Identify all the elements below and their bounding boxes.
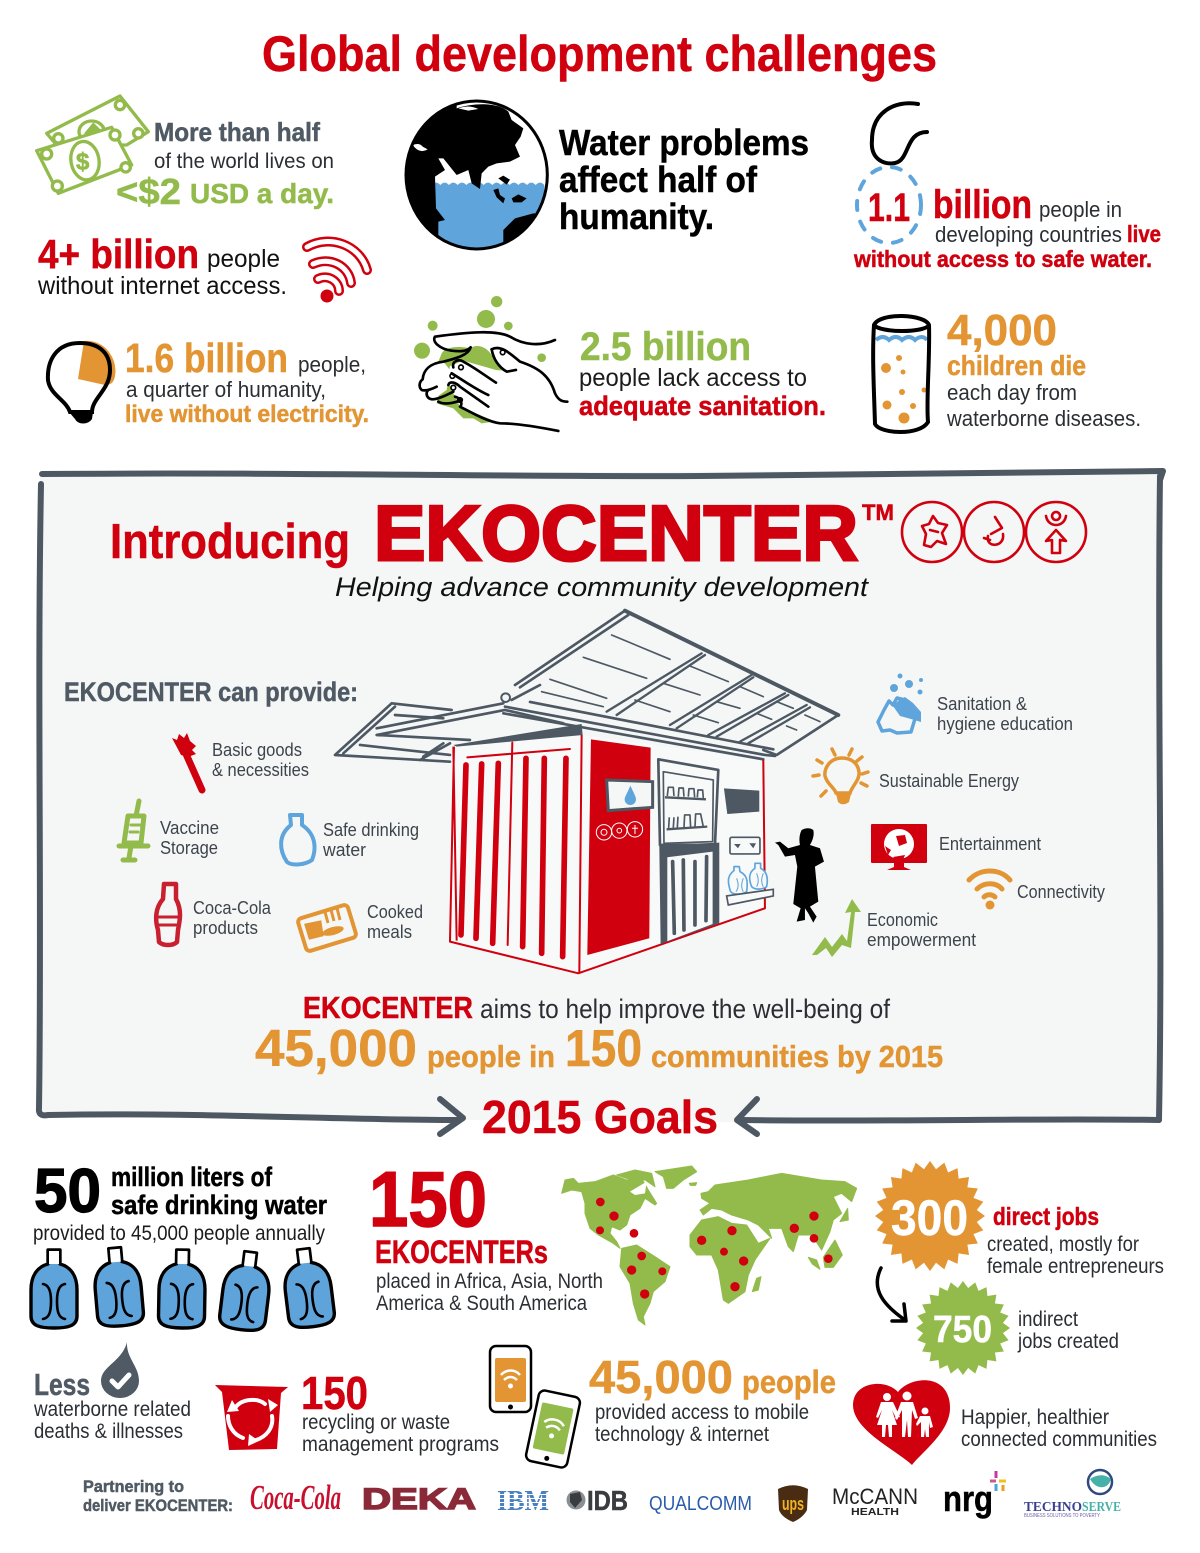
service: safe drinking water: water (322, 840, 366, 860)
service: cooked meals: Cooked (367, 902, 423, 922)
text: children die: children die (947, 350, 1086, 381)
small badges on panel (596, 822, 643, 840)
panel background and sketch border (39, 470, 1163, 1134)
logo: TechnoServe: TECHNO (1024, 1500, 1082, 1515)
service: vaccine storage: Vaccine (160, 818, 219, 838)
text: internet (37, 231, 287, 300)
text: mobile access: people (742, 1364, 836, 1400)
icon: three EKOCENTER badges (902, 502, 1086, 562)
service: Coca-Cola products: products (193, 918, 258, 938)
panel: introducing EKOCENTER (39, 470, 1163, 1134)
service: basic goods (172, 733, 309, 790)
text: internet: people (207, 245, 280, 273)
goal: less waterborne illness (33, 1342, 191, 1443)
logo: UPS: ups (782, 1494, 804, 1514)
illustration: EKOCENTER kiosk (335, 611, 838, 973)
logo: IDB: IDB (587, 1485, 628, 1516)
text: direct jobs: direct jobs (993, 1203, 1099, 1231)
water taps plate (730, 837, 760, 854)
text: recycling: management programs (302, 1433, 499, 1456)
service: entertainment: Entertainment (939, 834, 1041, 854)
text: more than half: <$2 (116, 171, 181, 212)
text: 150 EKOCENTERs: EKOCENTERs (375, 1234, 548, 1270)
text: electricity: people, (298, 352, 366, 377)
goal: 150 EKOCENTERs (369, 1155, 857, 1325)
text: electricity: live without electricity. (125, 401, 369, 428)
logo: TechnoServe (1024, 1470, 1121, 1519)
icon: money bills: $ (76, 148, 89, 175)
kiosk outline (450, 735, 765, 973)
arrow: direct to indirect jobs (877, 1268, 906, 1321)
goal: happier communities (853, 1380, 1157, 1465)
logo: TechnoServe: BUSINESS SOLUTIONS TO POVERTY (1024, 1513, 1101, 1519)
icon: drop with check (101, 1342, 139, 1398)
text: more than half (116, 117, 334, 212)
icon: washing hands (414, 296, 567, 431)
icon: orange phone (490, 1346, 531, 1412)
service: sustainable energy (813, 749, 1019, 804)
service: sustainable energy: Sustainable Energy (879, 771, 1019, 791)
icon: five water jugs (31, 1246, 336, 1333)
text: children die: waterborne diseases. (946, 406, 1141, 431)
stat: 1.6 billion without electricity (48, 335, 369, 428)
text: 50 million liters (33, 1157, 327, 1245)
text: sanitation: 2.5 billion (580, 325, 751, 369)
logo: Coca-Cola: Coca-Cola (250, 1478, 341, 1517)
text: sanitation: people lack access to (579, 364, 807, 392)
service: economic empowerment: empowerment (867, 930, 976, 950)
service: economic empowerment: Economic (867, 910, 938, 930)
text: electricity (125, 335, 369, 428)
text: 50 million liters: safe drinking water (111, 1190, 327, 1220)
text: 50 million liters: million liters of (111, 1162, 273, 1192)
text: less deaths: waterborne related (33, 1398, 191, 1421)
logo: IBM: IBM (497, 1486, 549, 1517)
text: 150 EKOCENTERs: America & South America (376, 1292, 587, 1315)
text: more than half: More than half (154, 117, 320, 147)
text: 150 EKOCENTERs: 150 (369, 1155, 487, 1243)
service: connectivity (969, 871, 1105, 910)
text: direct jobs: created, mostly for (987, 1233, 1139, 1256)
kiosk roof and solar panels (335, 611, 838, 762)
service: connectivity: Connectivity (1017, 882, 1105, 902)
service: vaccine storage: Storage (160, 838, 218, 858)
service: basic goods: Basic goods (212, 740, 302, 760)
service: entertainment (871, 824, 1041, 870)
text: mobile access: technology & internet (595, 1423, 769, 1446)
text: partnering to deliver (83, 1477, 233, 1515)
logo: McCann Health: McCANN (832, 1484, 918, 1509)
partners strip (83, 1470, 1121, 1522)
text: less deaths (33, 1367, 191, 1443)
text: electricity: a quarter of humanity, (126, 377, 326, 402)
badge: 750 (916, 1281, 1010, 1375)
text: indirect jobs: jobs created (1017, 1330, 1119, 1353)
service: sanitation and hygiene: Sanitation & (937, 694, 1027, 714)
callout: EKOCENTER aims: people in (427, 1039, 555, 1074)
text: water problems: humanity. (559, 196, 714, 237)
title: Global development challenges (262, 26, 937, 82)
service: sanitation and hygiene (878, 674, 1073, 734)
stat: 4,000 children die (873, 306, 1141, 432)
stat: more than half live on under $2 (37, 96, 334, 212)
dark sign box (724, 788, 759, 814)
icon: green phone (525, 1389, 581, 1469)
heading: Introducing EKOCENTER: Introducing (110, 515, 350, 569)
text: mobile access: provided access to mobile (595, 1401, 809, 1424)
icon: money bills (37, 96, 148, 193)
shelves and vending door (658, 759, 718, 845)
text: recycling: 150 (301, 1367, 368, 1419)
text: 150 EKOCENTERs: placed in Africa, Asia, North (376, 1270, 603, 1293)
service: vaccine storage (119, 801, 219, 860)
silhouette: woman (775, 828, 824, 923)
text: safe water: without access to safe water. (853, 246, 1152, 272)
text: partnering to deliver: deliver EKOCENTER: (83, 1496, 233, 1515)
text: sanitation: adequate sanitation. (579, 391, 826, 421)
text: safe water: billion (933, 183, 1032, 227)
heading: can provide: EKOCENTER can provide: (64, 677, 358, 707)
logo: TechnoServe: SERVE (1082, 1500, 1121, 1515)
service: cooked meals (297, 902, 423, 952)
world map with red location dots (562, 1166, 857, 1325)
service: Coca-Cola products: Coca-Cola (193, 898, 272, 918)
text: recycling (301, 1367, 499, 1456)
icon: half-submerged globe (400, 95, 548, 252)
badge: 750: 750 (933, 1309, 992, 1351)
logo: DEKA: DEKA (362, 1483, 476, 1516)
heading: 2015 Goals: 2015 Goals (482, 1091, 718, 1143)
text: mobile access: 45,000 (589, 1351, 733, 1403)
text: safe water: developing countries (935, 222, 1122, 247)
text: safe water: 1.1 (868, 186, 910, 230)
text: less deaths: Less (34, 1367, 90, 1402)
text: safe water (853, 183, 1161, 272)
icon: recycling bin (215, 1385, 288, 1450)
text: happier communities (961, 1406, 1157, 1451)
text: recycling: recycling or waste (302, 1411, 450, 1434)
callout: EKOCENTER aims: 150 (565, 1020, 642, 1078)
text: 50 million liters: 50 (34, 1157, 101, 1226)
text: partnering to deliver: Partnering to (83, 1477, 184, 1496)
text: indirect jobs (1017, 1308, 1119, 1353)
stat: 1.1 billion without safe water (853, 103, 1161, 272)
callout: EKOCENTER aims: communities by 2015 (651, 1039, 943, 1074)
text: safe water: people in (1039, 197, 1122, 222)
stat: 2.5 billion lack sanitation (414, 296, 826, 431)
text: less deaths: deaths & illnesses (34, 1420, 183, 1443)
water screen (607, 780, 653, 811)
text: water problems: Water problems (559, 122, 809, 163)
badge: 300: 300 (891, 1190, 968, 1246)
text: children die (946, 306, 1141, 431)
heading: Introducing EKOCENTER: EKOCENTER (374, 489, 858, 577)
logo: UPS (778, 1485, 808, 1522)
goal: 50 million liters (31, 1157, 336, 1333)
text: mobile access (589, 1351, 836, 1446)
icon: light bulb (48, 341, 115, 424)
text: children die: 4,000 (947, 306, 1057, 355)
logo: McCann Health: HEALTH (851, 1507, 899, 1518)
heading: Introducing EKOCENTER (110, 489, 894, 577)
text: safe water: live (1127, 221, 1161, 247)
text: internet: 4+ billion (38, 231, 199, 277)
text: 150 EKOCENTERs (369, 1155, 603, 1315)
logo: NRG: nrg (943, 1478, 993, 1519)
heading: Introducing EKOCENTER: TM (862, 500, 894, 525)
goal: 45,000 people mobile access (490, 1346, 836, 1469)
callout: EKOCENTER aims: EKOCENTER (303, 990, 473, 1025)
text: indirect jobs: indirect (1018, 1308, 1078, 1331)
text: direct jobs (987, 1203, 1164, 1278)
text: more than half: of the world lives on (154, 150, 334, 173)
icon: wifi signal (307, 242, 367, 302)
text: happier communities: connected communities (961, 1428, 1157, 1451)
text: water problems (559, 122, 809, 237)
service: safe drinking water: Safe drinking (323, 820, 419, 840)
logo: IDB (566, 1485, 628, 1516)
container stripes (461, 743, 570, 957)
subtitle: Helping advance community development (335, 572, 870, 602)
text: more than half: USD a day. (190, 178, 334, 209)
badge: 300 (875, 1161, 985, 1271)
goal: 300 direct jobs (875, 1161, 1164, 1321)
logo: Qualcomm: QUALCOMM (649, 1493, 752, 1515)
icon: glass of dirty water (873, 316, 929, 432)
icon: heart with family (853, 1380, 950, 1465)
text: 50 million liters: provided to 45,000 people annually (33, 1222, 325, 1245)
service: economic empowerment (812, 899, 976, 957)
service: Coca-Cola products (156, 884, 272, 945)
text: electricity: 1.6 billion (125, 335, 288, 381)
icon: dashed water drop (857, 167, 921, 243)
text: direct jobs: female entrepreneurs (987, 1255, 1164, 1278)
text: happier communities: Happier, healthier (961, 1406, 1109, 1429)
text: water problems: affect half of (559, 159, 758, 200)
water jugs on shelf (728, 863, 767, 894)
callout: EKOCENTER aims (255, 990, 943, 1078)
icon: tap (872, 103, 927, 163)
text: sanitation (579, 325, 826, 421)
callout: EKOCENTER aims: aims to help improve the well-being of (480, 994, 890, 1024)
kiosk body (450, 735, 765, 973)
service: cooked meals: meals (367, 922, 412, 942)
service: sanitation and hygiene: hygiene education (937, 714, 1073, 734)
text: internet: without internet access. (37, 272, 287, 300)
callout: EKOCENTER aims: 45,000 (255, 1020, 417, 1078)
goal: 150 recycling programs (215, 1367, 499, 1456)
service: safe drinking water (281, 815, 419, 864)
stat: water problems (400, 95, 809, 252)
service: basic goods: & necessities (212, 760, 309, 780)
text: children die: each day from (947, 380, 1077, 405)
stat: 4+ billion without internet (37, 231, 367, 302)
goal: 750 indirect jobs (916, 1281, 1119, 1375)
red kiosk panel (587, 739, 651, 955)
